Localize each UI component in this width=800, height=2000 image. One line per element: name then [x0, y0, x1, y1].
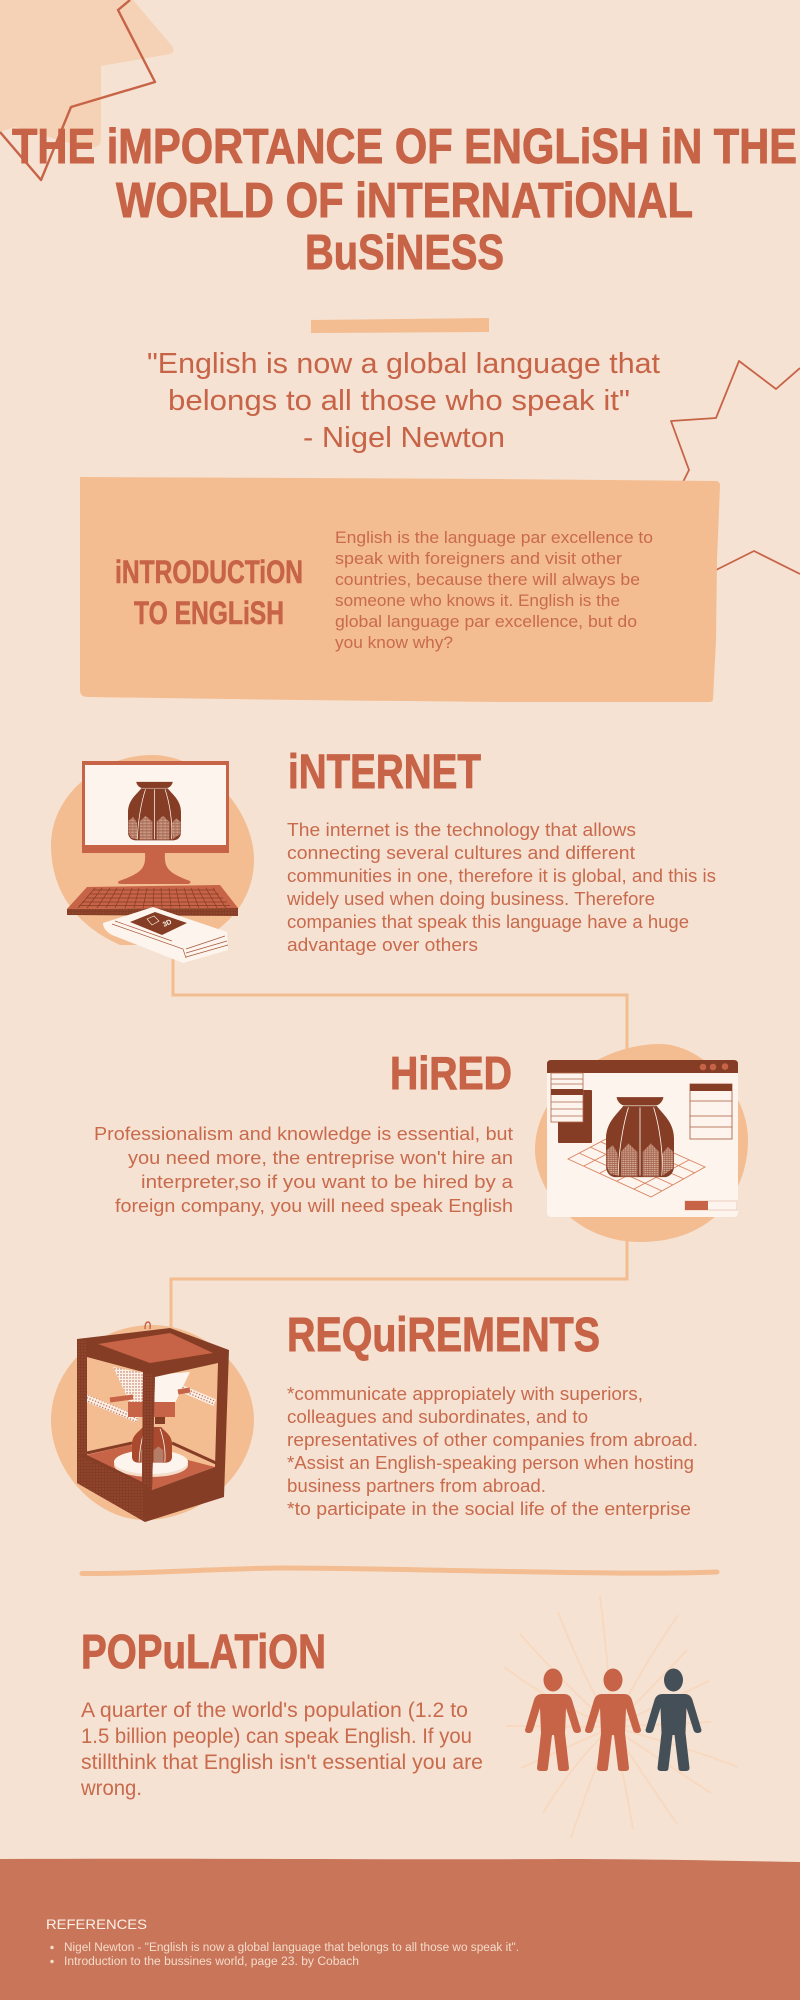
requirements text: colleagues and subordinates, and to	[287, 1407, 588, 1427]
internet heading: iNTERNET	[288, 746, 481, 799]
icon: browser window illustration	[535, 1044, 748, 1242]
requirements text: *to participate in the social life of the enterprise	[287, 1499, 691, 1519]
person 3	[646, 1668, 702, 1771]
book: 3D	[162, 919, 173, 929]
population heading: POPuLATiON	[81, 1626, 326, 1679]
title: WORLD OF iNTERNATiONAL	[116, 174, 693, 228]
section: population	[80, 1626, 483, 1800]
icon: computer illustration	[51, 755, 254, 963]
internet text: connecting several cultures and different	[287, 842, 635, 863]
intro heading: iNTRODUCTiON	[115, 554, 303, 590]
quote: belongs to all those who speak it"	[168, 385, 630, 417]
zigzag line: right	[671, 361, 800, 574]
intro text	[335, 528, 653, 652]
requirements text	[287, 1384, 698, 1519]
icon: pottery wheel lantern illustration	[51, 1322, 254, 1522]
person 1	[525, 1668, 581, 1771]
population text	[80, 1698, 483, 1800]
book	[103, 907, 228, 963]
rays	[504, 1596, 738, 1838]
left tool panels	[551, 1073, 592, 1143]
population text: 1.5 billion people) can speak English. If you	[81, 1724, 472, 1748]
requirements text: representatives of other companies from abroad.	[287, 1430, 698, 1450]
references list: Introduction to the bussines world, page 23. by Cobach	[64, 1956, 359, 1968]
section: requirements	[287, 1309, 698, 1519]
quote	[147, 348, 660, 454]
intro text: global language par excellence, but do	[335, 612, 637, 631]
blob behind window	[535, 1044, 748, 1242]
references list	[50, 1942, 519, 1968]
decorative blob: top left	[0, 0, 174, 147]
icon: people with rays	[504, 1596, 738, 1838]
vase	[606, 1097, 674, 1177]
hired text: Professionalism and knowledge is essential, but	[94, 1123, 513, 1144]
keyboard	[67, 885, 238, 916]
section: internet	[286, 746, 716, 955]
hired text	[94, 1123, 514, 1216]
requirements text: business partners from abroad.	[287, 1476, 546, 1496]
population text: wrong.	[80, 1776, 142, 1800]
footer band	[0, 1859, 800, 2000]
connector lines	[171, 955, 627, 1330]
hired text: foreign company, you will need speak English	[115, 1195, 513, 1216]
population text: A quarter of the world's population (1.2 to	[81, 1698, 468, 1722]
progress bar	[685, 1201, 737, 1210]
quote: "English is now a global language that	[147, 348, 660, 380]
hired heading: HiRED	[390, 1047, 512, 1099]
zigzag line: top left	[0, 0, 155, 180]
funnel and press	[81, 1367, 216, 1424]
title	[12, 120, 797, 280]
internet text: widely used when doing business. Therefore	[286, 888, 655, 909]
section divider	[82, 1568, 717, 1574]
internet text: communities in one, therefore it is global, and this is	[287, 865, 716, 886]
perspective grid	[568, 1130, 705, 1197]
internet text	[286, 819, 716, 955]
section: hired	[94, 1047, 514, 1216]
internet text: The internet is the technology that allows	[287, 819, 636, 840]
panel: introduction	[80, 477, 720, 702]
monitor	[82, 761, 229, 884]
intro text: countries, because there will always be	[335, 570, 640, 589]
title: BuSiNESS	[305, 226, 504, 280]
lantern frame	[77, 1322, 229, 1522]
requirements heading: REQuiREMENTS	[287, 1309, 600, 1362]
intro text: English is the language par excellence to	[335, 528, 653, 547]
title divider bar	[311, 318, 489, 333]
intro heading	[115, 554, 303, 631]
small vase	[132, 1427, 172, 1463]
internet text: advantage over others	[287, 934, 478, 955]
lantern floor and wheel	[87, 1443, 216, 1490]
intro text: speak with foreigners and visit other	[335, 549, 622, 568]
blob behind computer	[51, 755, 254, 945]
references heading: REFERENCES	[46, 1916, 147, 1932]
requirements text: *communicate appropiately with superiors,	[287, 1384, 643, 1404]
browser window	[547, 1060, 738, 1217]
hired text: interpreter,so if you want to be hired by a	[141, 1171, 514, 1192]
right tool panel	[690, 1084, 732, 1139]
intro text: you know why?	[335, 633, 453, 652]
intro box	[80, 477, 720, 702]
hired text: you need more, the entreprise won't hire an	[128, 1147, 513, 1168]
person 2	[585, 1668, 641, 1771]
requirements text: *Assist an English-speaking person when hosting	[287, 1453, 694, 1473]
internet text: companies that speak this language have a huge	[287, 911, 689, 932]
quote: - Nigel Newton	[303, 422, 505, 454]
references list: Nigel Newton - "English is now a global language that belongs to all those wo speak it".	[64, 1942, 519, 1954]
intro text: someone who knows it. English is the	[335, 591, 620, 610]
intro heading: TO ENGLiSH	[134, 595, 284, 631]
blob behind lantern	[51, 1325, 254, 1520]
population text: stillthink that English isn't essential you are	[81, 1750, 483, 1774]
